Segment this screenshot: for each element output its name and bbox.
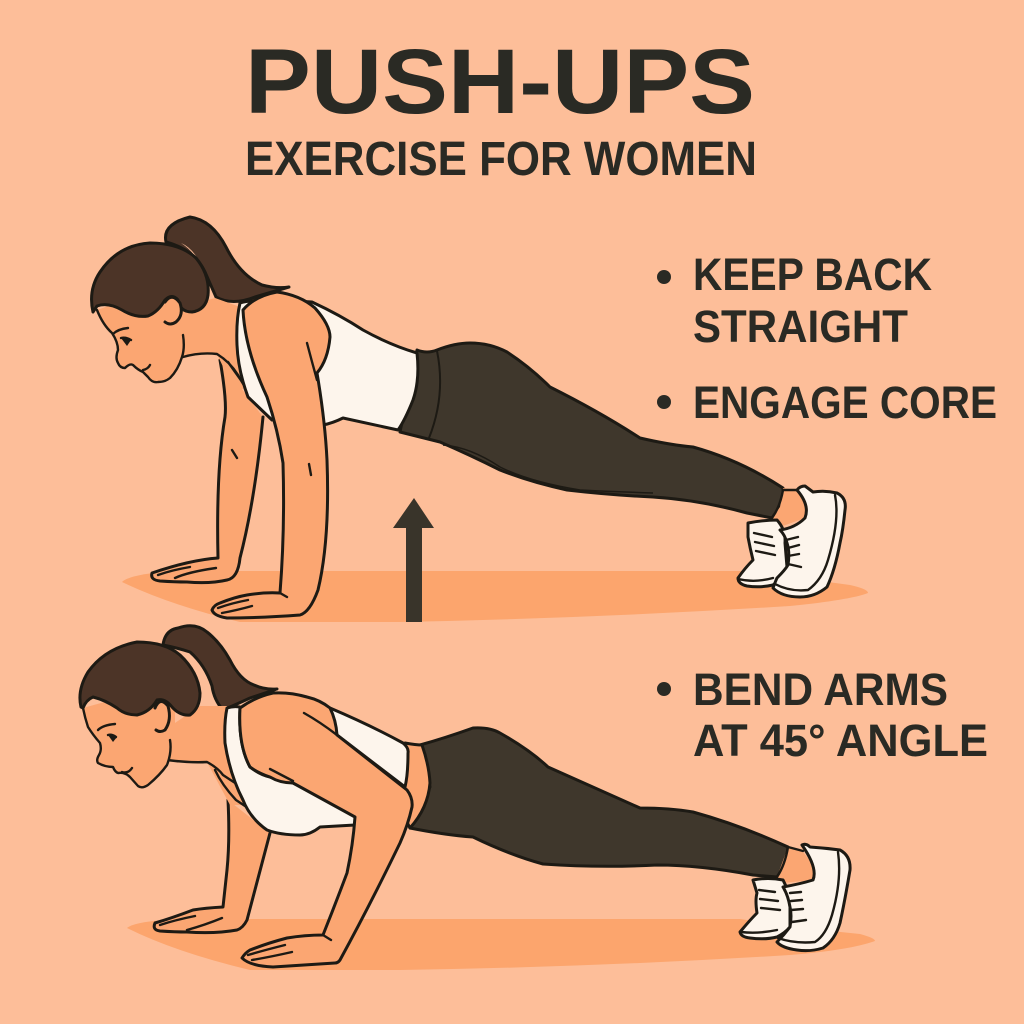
hair tie gap	[181, 243, 208, 282]
ankle	[777, 847, 815, 883]
figure: plank position, arms straight	[92, 217, 845, 618]
mouth	[122, 768, 132, 772]
ponytail	[163, 626, 277, 710]
tip line two: AT 45° ANGLE	[693, 715, 988, 766]
hair	[92, 243, 208, 316]
leggings	[410, 728, 788, 877]
neck and chest	[167, 706, 250, 805]
head: face	[83, 695, 175, 787]
midriff	[395, 743, 430, 828]
floor shadow: bottom figure	[127, 919, 875, 970]
bullet	[657, 682, 671, 696]
mouth	[143, 365, 150, 370]
tip: engage core: ENGAGE CORE	[693, 377, 997, 428]
head: face	[97, 295, 190, 382]
subtitle: EXERCISE FOR WOMEN	[245, 133, 757, 186]
bullet	[657, 270, 671, 284]
near arm and hand	[240, 693, 412, 967]
hair tie gap	[182, 652, 205, 688]
eye and brow	[98, 724, 116, 737]
far shoe	[740, 878, 790, 939]
white tank top: front panel	[225, 707, 357, 835]
leggings	[400, 343, 783, 518]
far shoe	[738, 520, 787, 587]
near shoe	[773, 486, 845, 597]
far arm and hand	[152, 360, 263, 583]
hair	[80, 642, 200, 715]
title: PUSH-UPS	[245, 31, 755, 133]
ponytail	[166, 217, 289, 302]
figure: lowered position, arms bent	[80, 626, 850, 967]
tip list: top figure	[657, 249, 997, 428]
tip: keep back straight: KEEP BACK	[693, 249, 932, 300]
white tank top: back panel	[330, 708, 408, 787]
bullet	[657, 395, 671, 409]
neck and chest	[183, 298, 252, 392]
far arm and hand	[154, 800, 270, 933]
near arm and hand	[212, 292, 330, 618]
tip: bend arms: BEND ARMS	[693, 664, 948, 715]
ankle	[772, 488, 807, 527]
tip list: bottom figure	[657, 664, 988, 766]
ear	[155, 701, 169, 732]
white tank top	[237, 300, 418, 430]
ear	[165, 297, 181, 324]
near shoe	[777, 844, 850, 951]
eye and brow	[113, 328, 131, 340]
arrow: push up	[393, 498, 434, 622]
tip line two: STRAIGHT	[693, 301, 908, 352]
floor shadow: top figure	[122, 571, 868, 622]
